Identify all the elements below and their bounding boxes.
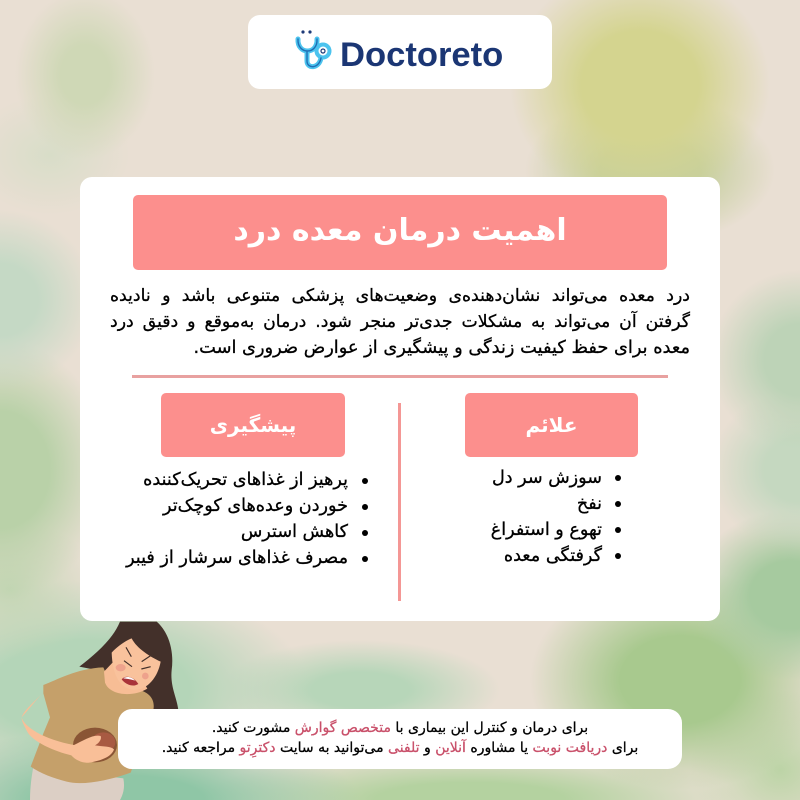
- symptoms list: سوزش سر دل: [492, 468, 602, 488]
- vertical divider: [398, 403, 401, 601]
- stomach pain: [73, 728, 117, 762]
- prevention list: خوردن وعده‌های کوچک‌تر: [163, 496, 348, 516]
- symptoms heading: [465, 393, 638, 457]
- callout: consultation: برای درمان و کنترل این بیماری با متخصص گوارش مشورت کنید.: [212, 720, 588, 736]
- panel: symptoms: [465, 393, 638, 566]
- intro paragraph: معده برای حفظ کیفیت زندگی و پیشگیری از عوارض ضروری است.: [193, 337, 690, 358]
- face: [112, 638, 161, 690]
- logo wordmark: Doctoreto: [340, 36, 503, 74]
- horizontal divider: [132, 375, 668, 378]
- symptoms list: گرفتگی معده: [504, 546, 602, 566]
- intro paragraph: [110, 286, 690, 358]
- hair: [79, 622, 178, 710]
- prevention list: مصرف غذاهای سرشار از فیبر: [126, 548, 348, 568]
- arm and hand: [22, 693, 114, 763]
- prevention list: پرهیز از غذاهای تحریک‌کننده: [143, 470, 348, 490]
- title banner: اهمیت درمان معده درد: [233, 213, 567, 248]
- callout: consultation: برای دریافت نوبت یا مشاوره آنلاین و تلفنی می‌توانید به سایت دکترِتو مراجعه کنید.: [162, 740, 638, 756]
- title banner: [133, 195, 667, 270]
- prevention list: کاهش استرس: [241, 522, 348, 542]
- logo card: [248, 15, 552, 89]
- callout: consultation: [118, 709, 682, 769]
- logo icon: stethoscope: [296, 30, 332, 70]
- prevention list: [125, 470, 368, 568]
- mouth: [122, 677, 138, 686]
- neck: [104, 660, 147, 694]
- intro paragraph: درد معده می‌تواند نشان‌دهنده‌ی وضعیت‌های پزشکی متنوعی باشد و نادیده: [110, 286, 690, 306]
- symptoms list: [491, 468, 621, 566]
- cheeks: [116, 664, 126, 671]
- panel: prevention: [125, 393, 368, 568]
- prevention heading: پیشگیری: [210, 413, 296, 437]
- symptoms heading: علائم: [525, 413, 578, 437]
- eyes and brows: [124, 647, 157, 669]
- prevention heading: [161, 393, 345, 457]
- intro paragraph: گرفتن آن می‌تواند به مشکلات جدی‌تر منجر شود. درمان به‌موقع و دقیق درد: [110, 312, 690, 332]
- shirt: [31, 667, 154, 783]
- illustration: woman with stomach pain: [22, 622, 178, 800]
- symptoms list: تهوع و استفراغ: [491, 520, 602, 540]
- pants: [30, 767, 124, 800]
- symptoms list: نفخ: [577, 494, 602, 514]
- main card: [80, 177, 720, 621]
